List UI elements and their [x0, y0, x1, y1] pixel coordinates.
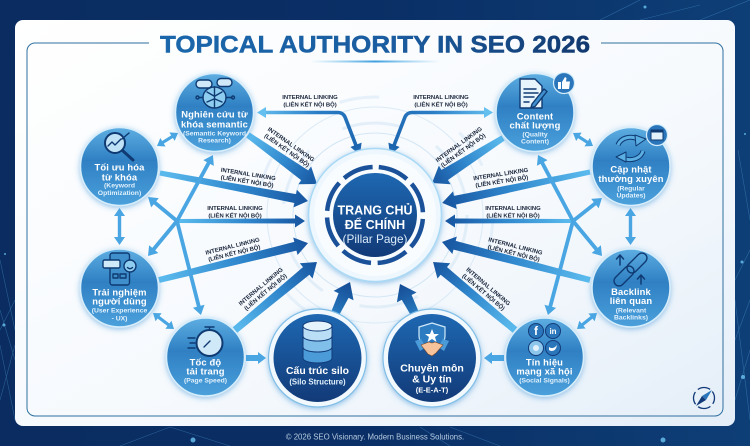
icon: social badges: in	[549, 327, 557, 336]
arrow: backlinks to pillar	[440, 233, 592, 289]
arrow: keyword and user experience two-way	[114, 208, 125, 245]
panel frame line	[27, 43, 723, 416]
node text: Backlinks)	[614, 314, 648, 322]
node: expertise and authority	[383, 309, 481, 407]
arrow: quality content to pillar	[426, 129, 509, 192]
icon: magnifier with trend	[105, 133, 133, 160]
footer copyright: © 2026 SEO Visionary. Modern Business Solutions.	[286, 432, 464, 442]
node text: (Regular	[617, 186, 645, 192]
label: left horizontal link	[207, 206, 263, 219]
icon: shield and handshake	[415, 323, 449, 356]
node text: (User Experience	[92, 308, 147, 314]
arrow: keyword and semantic two-way	[154, 129, 181, 150]
arrow: user experience and speed two-way	[150, 309, 177, 333]
icon: social badges	[528, 324, 560, 356]
icon: phone with chat and smile	[103, 253, 136, 285]
label: social link: (LIÊN KẾT NỘI BỘ)	[461, 272, 507, 312]
internal linking labels	[205, 95, 543, 313]
arrow: keyword optimization to pillar	[158, 164, 310, 210]
label: social link: INTERNAL LINKING	[464, 267, 511, 308]
label: updates link	[473, 168, 530, 190]
label: speed link: INTERNAL LINKING	[238, 267, 285, 307]
title: TOPICAL AUTHORITY IN SEO 2026	[160, 32, 590, 58]
node text: chất lượng	[510, 120, 561, 130]
node text	[400, 362, 464, 394]
icon: document and pen	[520, 79, 547, 108]
pillar page hub: ĐỂ CHÍNH	[345, 217, 405, 232]
node text: (Social Signals)	[519, 378, 570, 384]
arrow: right cross to backlinks	[568, 217, 607, 260]
arrow: left cross to keyword	[144, 192, 181, 226]
arrow: left cross to user experience	[143, 217, 182, 260]
node text	[286, 365, 349, 386]
node text: tải trang	[186, 366, 225, 376]
node text: người dùng	[92, 296, 147, 306]
label: right horizontal link: INTERNAL LINKING	[485, 206, 541, 212]
node text: Tín hiệu	[526, 356, 563, 368]
label: user experience link: (LIÊN KẾT NỘI BỘ)	[207, 243, 261, 263]
node text	[184, 356, 227, 384]
arrow: regular updates to pillar	[440, 163, 592, 212]
node text	[92, 286, 147, 322]
arrow: right cross to social	[542, 219, 579, 317]
arrows: right spokes into pillar	[388, 107, 592, 338]
node text	[510, 110, 561, 146]
node text	[610, 286, 652, 322]
node text: Backlink	[611, 286, 652, 297]
concentric backdrop rings	[257, 97, 493, 333]
node: keyword optimization	[80, 128, 158, 206]
badge: thumbs up	[554, 72, 574, 94]
arrow: content and updates two-way	[570, 129, 596, 150]
node text: Content)	[521, 138, 549, 146]
node text: & Uy tín	[412, 374, 452, 386]
icon: stopwatch	[188, 327, 222, 356]
arrow: backlinks and social two-way	[574, 309, 600, 333]
label: keyword link: INTERNAL LINKING	[220, 168, 276, 182]
arrows: links between cluster nodes	[114, 129, 636, 364]
node text: khóa semantic	[181, 118, 248, 130]
node text: (Silo Structure)	[289, 378, 346, 386]
node text: Tốc độ	[190, 356, 221, 368]
node text: (Quality	[522, 132, 548, 138]
label: user experience link: INTERNAL LINKING	[205, 237, 261, 257]
arrows: left spokes into pillar	[157, 107, 362, 338]
label: left horizontal link: (LIÊN KẾT NỘI BỘ)	[208, 211, 262, 219]
arrow: page speed to pillar	[229, 254, 323, 338]
icon: database stack	[303, 321, 332, 363]
label: right horizontal link: (LIÊN KẾT NỘI BỘ)	[486, 211, 540, 219]
node: page speed	[166, 318, 244, 396]
node text: (Relevant	[616, 308, 647, 314]
node text: Chuyên môn	[400, 362, 464, 374]
node text: từ khóa	[102, 172, 138, 182]
pillar heading: TRANG CHỦ	[338, 202, 412, 218]
node text: (E-E-A-T)	[416, 386, 449, 394]
icon: brain with speech bubbles	[196, 78, 234, 108]
node: quality content	[496, 72, 574, 152]
arrow: right elbow link	[388, 107, 493, 155]
node text: thường xuyên	[598, 173, 664, 184]
label: right horizontal link	[485, 206, 541, 219]
node text: Optimization)	[98, 190, 141, 197]
arrow: left elbow link	[257, 107, 362, 155]
node text: Cấu trúc silo	[286, 365, 349, 377]
icon: refresh arrows	[616, 135, 646, 162]
label: backlink link: INTERNAL LINKING	[488, 237, 543, 257]
node text: Updates)	[616, 192, 646, 200]
node text	[181, 108, 248, 144]
arrow: right cross to updates	[569, 193, 606, 226]
label: top left link: (LIÊN KẾT NỘI BỘ)	[283, 100, 337, 108]
arrow: left cross to semantic	[172, 152, 218, 224]
arrow: social signals to pillar	[427, 254, 521, 338]
label: keyword link	[219, 168, 276, 190]
pillar subtitle: (Pillar Page)	[343, 232, 408, 246]
title underline	[310, 60, 440, 62]
arrow: right cross to content	[533, 152, 578, 224]
node text: (Keyword	[104, 182, 135, 190]
icon: compass	[689, 383, 719, 413]
label: updates link: (LIÊN KẾT NỘI BỘ)	[475, 173, 529, 189]
node text: Research)	[198, 138, 231, 144]
node text	[516, 356, 573, 384]
node text: (Semantic Keyword	[183, 130, 246, 138]
node text: - UX)	[112, 316, 127, 322]
pillar page hub	[308, 148, 442, 282]
label: content link: INTERNAL LINKING	[435, 126, 484, 164]
node: semantic keyword research	[176, 74, 254, 152]
node text: liên quan	[610, 295, 652, 306]
node: regular updates	[592, 124, 670, 206]
arrow: left cross to speed	[171, 220, 207, 316]
label: updates link: INTERNAL LINKING	[473, 168, 529, 182]
label: semantic link: INTERNAL LINKING	[266, 127, 315, 164]
node text: Tối ưu hóa	[95, 162, 145, 172]
label: top right link	[413, 95, 469, 108]
node text: mạng xã hội	[516, 366, 573, 376]
icon: social badges: f	[534, 324, 539, 338]
arrow: horizontal left to pillar	[177, 214, 305, 228]
label: semantic link: (LIÊN KẾT NỘI BỘ)	[263, 132, 311, 169]
node: user experience	[80, 249, 158, 327]
arrow: horizontal right to pillar	[445, 214, 573, 228]
arrow: updates and backlinks two-way	[625, 208, 636, 245]
node text: Trải nghiệm	[92, 286, 147, 298]
node text: (Page Speed)	[184, 378, 227, 384]
node text: Cập nhật	[610, 164, 652, 174]
arrow: silo to pillar	[323, 277, 360, 323]
node: social signals	[506, 318, 584, 396]
label: top right link: INTERNAL LINKING	[413, 95, 469, 101]
arrow: social to E-E-A-T	[484, 352, 504, 364]
node: relevant backlinks	[592, 249, 670, 327]
icon: chain link with arrows	[612, 251, 649, 288]
arrow: E-E-A-T to pillar	[390, 279, 427, 323]
node text	[95, 162, 145, 197]
arrow: speed to silo	[246, 352, 266, 364]
label: backlink link: (LIÊN KẾT NỘI BỘ)	[487, 243, 541, 263]
label: left horizontal link: INTERNAL LINKING	[207, 206, 263, 212]
badge: calendar	[646, 124, 668, 146]
label: speed link: (LIÊN KẾT NỘI BỘ)	[242, 272, 288, 312]
label: content link: (LIÊN KẾT NỘI BỘ)	[439, 131, 487, 169]
arrow: semantic research to pillar	[242, 126, 323, 193]
label: top left link: INTERNAL LINKING	[282, 95, 338, 101]
arrow: user experience to pillar	[157, 234, 310, 289]
node text: Nghiên cứu từ	[181, 108, 248, 120]
node: silo structure	[268, 309, 366, 407]
label: top left link	[282, 95, 338, 108]
label: keyword link: (LIÊN KẾT NỘI BỘ)	[220, 173, 274, 189]
label: top right link: (LIÊN KẾT NỘI BỘ)	[414, 100, 468, 108]
node text: Content	[517, 110, 553, 122]
node text	[598, 164, 664, 200]
